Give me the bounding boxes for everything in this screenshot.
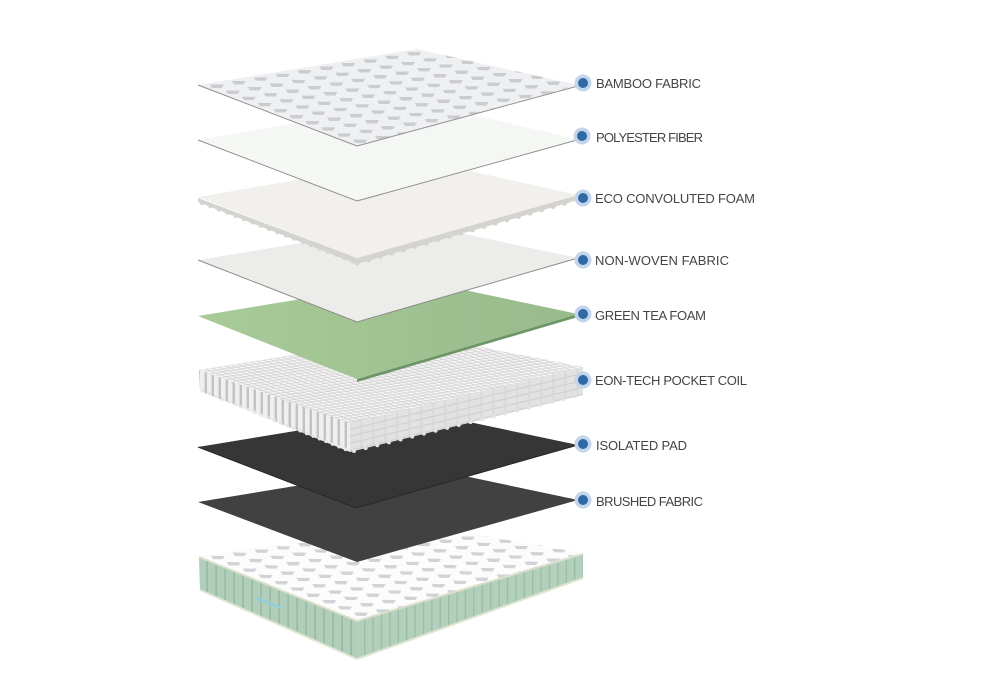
- label: eco convoluted foam: ECO CONVOLUTED FOAM: [595, 191, 755, 206]
- label: green tea foam: GREEN TEA FOAM: [595, 308, 706, 323]
- complete mattress: [199, 524, 583, 659]
- label: brushed fabric: BRUSHED FABRIC: [596, 494, 703, 509]
- layer: polyester fiber: [198, 102, 577, 201]
- label: eon-tech pocket coil: EON-TECH POCKET COIL: [595, 373, 747, 388]
- label: isolated pad: [574, 436, 687, 453]
- label: isolated pad: ISOLATED PAD: [596, 438, 687, 453]
- layer: isolated pad: [198, 411, 578, 508]
- layer: eco convoluted foam: [198, 159, 578, 264]
- layer: eon-tech pocket coil: [199, 335, 583, 452]
- label: non-woven fabric: NON-WOVEN FABRIC: [595, 253, 729, 268]
- layer: brushed fabric: [198, 466, 578, 562]
- label: bamboo fabric: BAMBOO FABRIC: [596, 76, 701, 91]
- layer: green tea foam: [198, 280, 578, 382]
- layer: non-woven fabric: [198, 224, 578, 322]
- layer: bamboo fabric: [198, 49, 578, 146]
- label: polyester fiber: POLYESTER FIBER: [596, 130, 703, 145]
